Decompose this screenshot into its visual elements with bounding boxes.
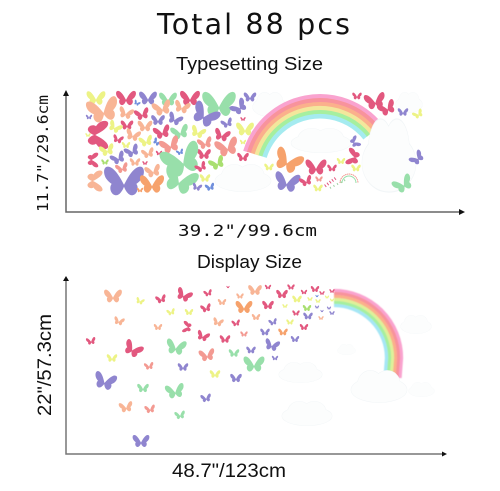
typesetting axes	[63, 90, 465, 215]
label: display height: 22"/57.3cm	[35, 314, 56, 416]
butterflies: display	[86, 284, 335, 447]
title: Total 88 pcs	[156, 8, 350, 41]
panel: display layout	[86, 284, 434, 447]
large cloud: display	[351, 371, 407, 402]
clouds: display	[279, 315, 434, 426]
mini rainbow dots	[325, 174, 358, 188]
panel: typesetting layout	[85, 91, 426, 197]
rainbow: display	[334, 290, 402, 378]
rainbow: typesetting	[245, 96, 381, 157]
display axes	[63, 276, 447, 456]
label: typesetting width: 39.2"/99.6cm	[178, 221, 317, 240]
heading: typesetting size: Typesetting Size	[176, 54, 323, 74]
butterflies: typesetting	[85, 91, 426, 197]
label: display width: 48.7"/123cm	[172, 461, 286, 482]
heading: display size: Display Size	[197, 252, 302, 272]
clouds: typesetting	[215, 92, 422, 191]
label: typesetting height: 11.7"/29.6cm	[34, 95, 52, 212]
large cloud: typesetting	[362, 120, 416, 192]
